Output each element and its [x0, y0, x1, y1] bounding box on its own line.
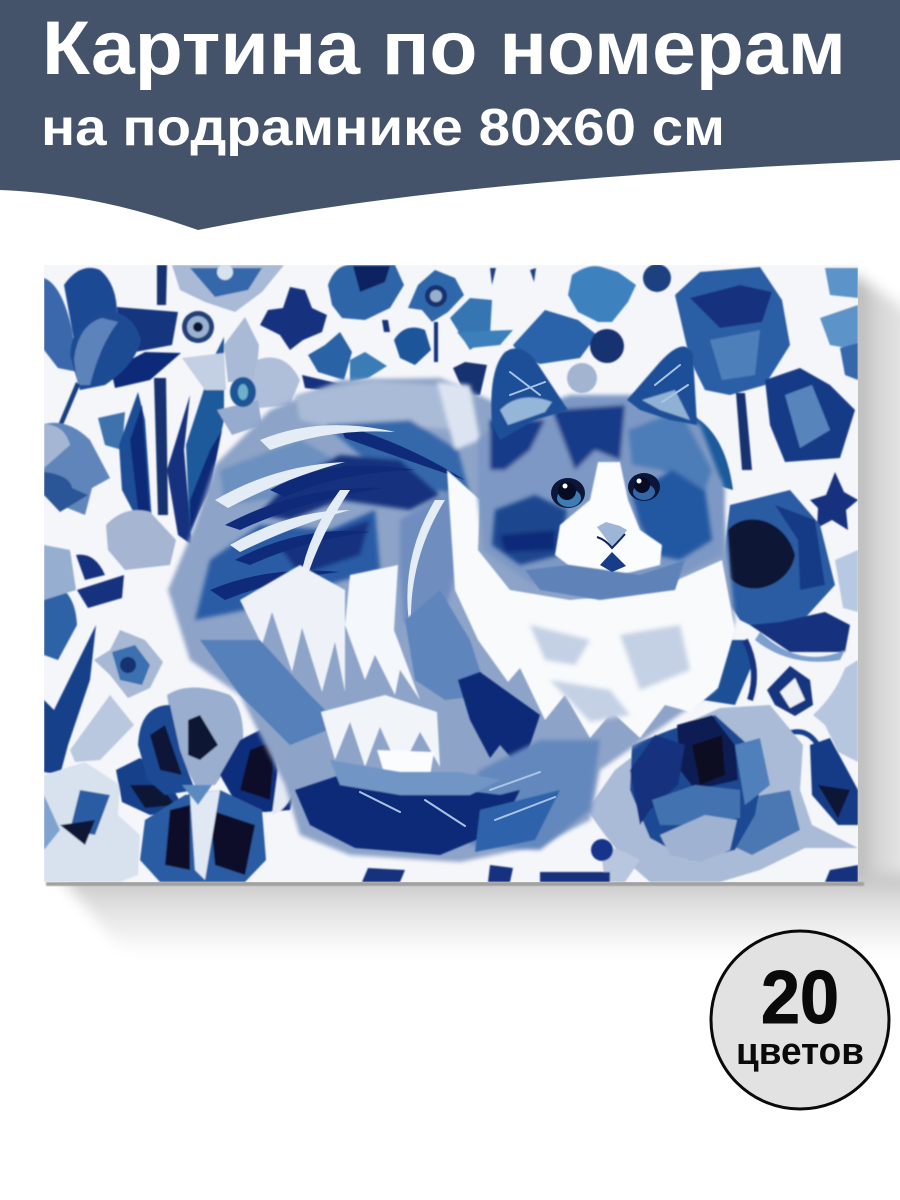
cat: nose and mouth: [597, 522, 627, 572]
cat: white chest: [447, 470, 735, 738]
badge label: цветов: [736, 1031, 864, 1073]
title: Картина по номерам: [42, 6, 846, 91]
cat: head: [478, 395, 725, 592]
cat: [168, 346, 735, 862]
cat: body base: [168, 378, 735, 862]
cat: fur strokes: [360, 365, 688, 826]
cat: back fur bands: [195, 380, 480, 640]
badge number: 20: [761, 955, 839, 1039]
cat: cheek patches: [492, 470, 712, 565]
flowers: top row: [260, 264, 671, 397]
cat: pale flank tufts: [200, 565, 488, 776]
flowers: bottom left white flower and pansy: [44, 688, 300, 882]
cat: paw and hind fur: [460, 740, 600, 850]
cat: eyes: [551, 473, 660, 508]
header banner: [0, 0, 900, 230]
flowers: top left tulips and leaves: [44, 264, 300, 570]
cat: chin shadow: [525, 560, 685, 600]
cat: navy back wisps: [210, 425, 465, 600]
flowers: top right rose and side flowers: [675, 267, 858, 825]
canvas painting: blue cat among flowers: [44, 264, 858, 882]
cat: white blaze and muzzle: [555, 462, 662, 575]
canvas shadow: [46, 272, 900, 955]
flowers: left side: [44, 545, 163, 775]
cat: pale back wisps: [215, 425, 445, 618]
cat: ears: [491, 346, 697, 440]
flowers: bottom right peony: [362, 705, 858, 882]
subtitle: на подрамнике 80х60 см: [41, 99, 725, 157]
badge: 20 цветов: [711, 931, 889, 1109]
cat: lower navy haunch: [458, 672, 540, 768]
cat: tail: [295, 760, 560, 855]
